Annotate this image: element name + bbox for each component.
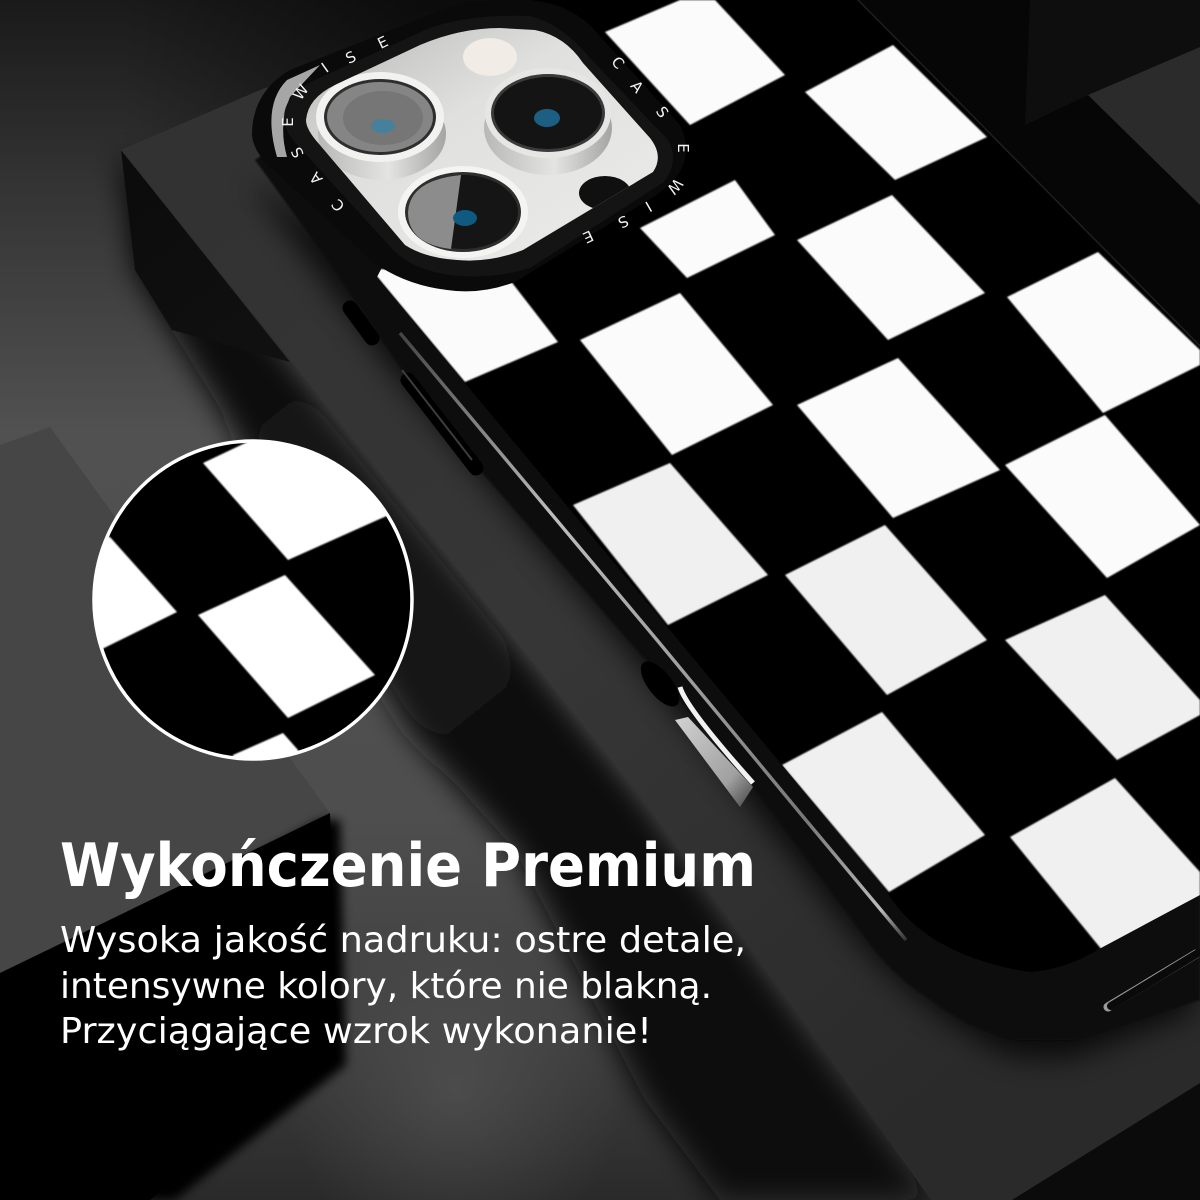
brand lettering: I	[642, 197, 655, 215]
flash	[463, 38, 517, 76]
lens: bottom	[398, 166, 528, 258]
brand lettering: C	[328, 195, 348, 215]
port slot	[350, 308, 372, 338]
brand lettering: W	[663, 175, 686, 198]
lens: right	[484, 68, 612, 175]
brand lettering: I	[318, 59, 332, 77]
top right background	[857, 0, 1200, 347]
microphone hole	[579, 176, 631, 210]
window	[306, 28, 658, 261]
camera bump	[252, 0, 692, 291]
lower left block	[0, 427, 346, 1200]
silver side streak	[680, 687, 753, 783]
brand lettering: C	[608, 53, 628, 73]
side button cavity	[634, 655, 686, 713]
speaker slot	[1108, 953, 1198, 1007]
phone shadow	[249, 181, 1194, 1058]
brand lettering: S	[287, 144, 308, 161]
brand lettering: A	[627, 77, 647, 97]
phone case	[255, 0, 1200, 1040]
brand lettering: S	[652, 103, 672, 121]
volume button highlight	[402, 370, 472, 460]
inner text ring	[284, 16, 673, 276]
brand lettering: E	[279, 117, 297, 127]
brand lettering: E	[580, 226, 596, 247]
block shadow face	[121, 150, 931, 1200]
brand lettering: S	[615, 211, 631, 232]
brand lettering: W	[289, 81, 313, 103]
silver side plate	[675, 717, 753, 807]
brand lettering: E	[375, 32, 391, 53]
brand lettering: S	[343, 47, 359, 68]
background scene	[0, 0, 882, 1200]
phone screen check pattern	[370, 0, 1200, 972]
case right edge	[857, 0, 1200, 347]
description text: intensywne kolory, które nie blakną.	[60, 966, 712, 1007]
zoom circle detail	[80, 436, 412, 765]
description text: Wysoka jakość nadruku: ostre detale,	[60, 920, 746, 961]
floor corner shadow	[1012, 1083, 1200, 1200]
description text	[60, 920, 746, 1052]
lens: left	[316, 72, 446, 180]
volume button slot	[408, 380, 476, 468]
brand lettering	[279, 32, 692, 247]
description text: Przyciągające wzrok wykonanie!	[60, 1011, 652, 1052]
brand lettering: A	[306, 168, 326, 188]
ring highlight crescent	[271, 65, 320, 157]
brand lettering: E	[674, 143, 692, 153]
title: Wykończenie Premium	[60, 831, 756, 901]
edge highlight	[400, 333, 906, 940]
